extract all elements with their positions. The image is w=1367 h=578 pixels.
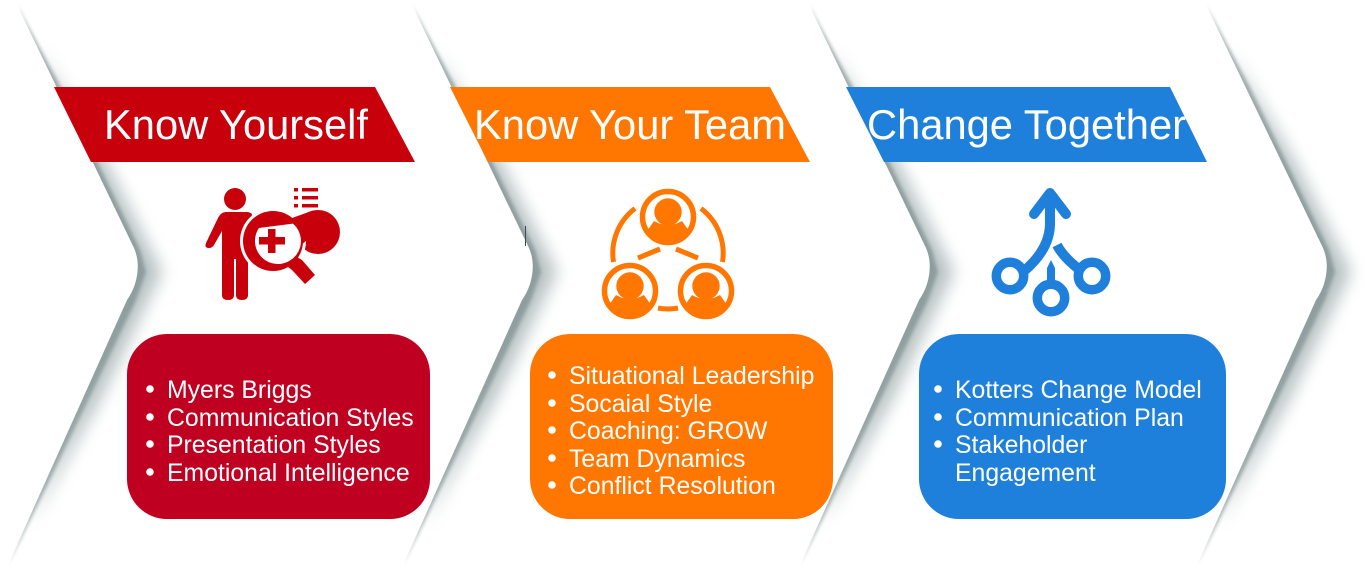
panel: Know Yourself list: Presentation Styles [167, 432, 381, 459]
chevron 1 [0, 5, 162, 565]
panel: Know Yourself list: Communication Styles [167, 405, 414, 432]
banner: Change Together [846, 87, 1207, 162]
panel: Know Yourself list: Myers Briggs [167, 377, 312, 404]
panel: Know Yourself list [127, 334, 430, 519]
banner: Know Your Team [450, 87, 810, 162]
panel: Know Your Team list [530, 334, 833, 519]
banner: Change Together: Change Together [867, 101, 1186, 148]
panel: Change Together list: Communication Plan [955, 405, 1184, 432]
icon: team circle [604, 192, 732, 316]
banner: Know Yourself: Know Yourself [104, 101, 368, 148]
panel: Know Yourself list: Emotional Intelligence [167, 460, 410, 487]
panel: Know Your Team list: Team Dynamics [569, 446, 745, 473]
icon: converging arrow [996, 193, 1106, 312]
panel: Know Your Team list: Coaching: GROW [569, 418, 768, 445]
panel: Change Together list: Stakeholder [955, 432, 1087, 459]
chevron 3 [392, 5, 954, 565]
banner: Know Your Team: Know Your Team [474, 101, 786, 148]
banner: Know Yourself [54, 87, 415, 162]
chevron 2 [0, 5, 557, 565]
panel: Know Your Team list: Situational Leadership [569, 363, 814, 390]
chevron 4 [789, 5, 1351, 565]
panel: Know Your Team list: Conflict Resolution [569, 473, 776, 500]
stray mark [525, 226, 526, 246]
icon: person with magnifier [205, 188, 340, 300]
panel: Change Together list [919, 334, 1226, 519]
panel: Change Together list: Kotters Change Model [955, 377, 1202, 404]
panel: Change Together list: Engagement [955, 460, 1096, 487]
panel: Know Your Team list: Socaial Style [569, 391, 712, 418]
